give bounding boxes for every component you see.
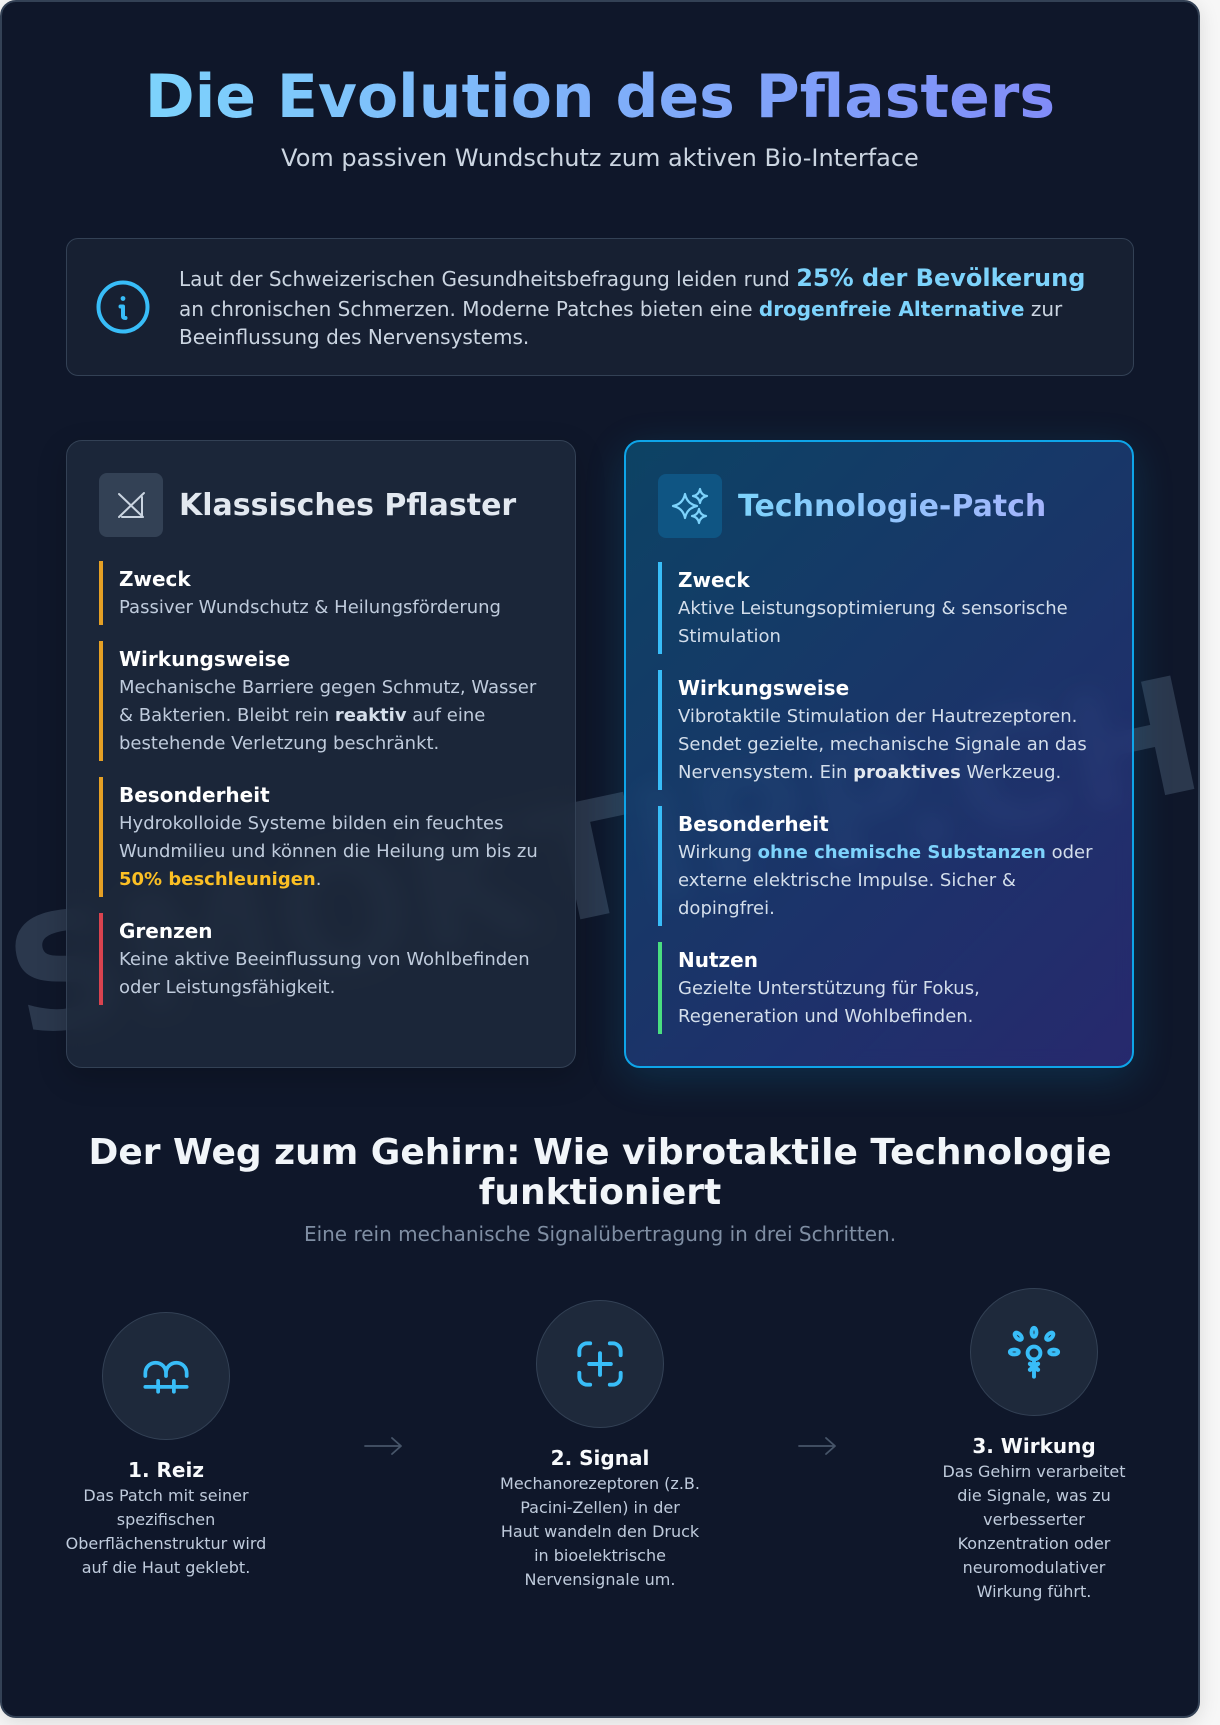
item: Zweck: Zweck xyxy=(119,567,191,591)
item: Besonderheit: Hydrokolloide Systeme bilden ein feuchtes xyxy=(119,813,503,834)
step text: die Signale, was zu xyxy=(957,1486,1111,1505)
title: Die Evolution des Pflasters xyxy=(145,62,1055,132)
step text xyxy=(942,1434,1126,1601)
step text: Konzentration oder xyxy=(958,1534,1110,1553)
section heading: funktioniert xyxy=(479,1172,721,1213)
item: Zweck xyxy=(99,561,543,625)
item: Besonderheit: Besonderheit xyxy=(119,783,270,807)
step text: neuromodulativer xyxy=(963,1558,1105,1577)
watermark: SMOKTIPP.CH xyxy=(0,642,1200,1075)
icon: info xyxy=(96,280,150,334)
step text: Haut wandeln den Druck xyxy=(501,1522,699,1541)
step text: 1. Reiz xyxy=(128,1458,204,1482)
step 3 xyxy=(942,1288,1126,1601)
item: Nutzen: Gezielte Unterstützung für Fokus, xyxy=(678,978,980,999)
item: Besonderheit xyxy=(99,777,543,897)
item: Besonderheit: 50% beschleunigen. xyxy=(119,869,321,890)
item: Wirkungsweise: & Bakterien. Bleibt rein reaktiv auf eine xyxy=(119,705,485,726)
callout text: an chronischen Schmerzen. Moderne Patches bieten eine drogenfreie Alternative zur xyxy=(179,297,1062,321)
item: Zweck: Passiver Wundschutz & Heilungsförderung xyxy=(119,597,501,618)
panel: statistic callout xyxy=(66,238,1134,376)
callout text: Laut der Schweizerischen Gesundheitsbefragung leiden rund 25% der Bevölkerung xyxy=(179,264,1085,292)
step text: Das Gehirn verarbeitet xyxy=(942,1462,1126,1481)
callout text: Beeinflussung des Nervensystems. xyxy=(179,325,529,349)
item: Wirkungsweise: Sendet gezielte, mechanische Signale an das xyxy=(678,734,1087,755)
item: Wirkungsweise: Nervensystem. Ein proaktives Werkzeug. xyxy=(678,762,1061,783)
heading: Technologie-Patch xyxy=(738,489,1046,524)
icon: sparkles xyxy=(658,474,722,538)
icon: plaster crossed xyxy=(99,473,163,537)
item: Besonderheit xyxy=(658,806,1100,926)
step text: Oberflächenstruktur wird xyxy=(66,1534,266,1553)
step text: auf die Haut geklebt. xyxy=(82,1558,250,1577)
item: Nutzen xyxy=(658,942,1100,1034)
step text xyxy=(66,1458,266,1577)
item: Grenzen xyxy=(99,913,543,1005)
section subtitle: Eine rein mechanische Signalübertragung in drei Schritten. xyxy=(304,1222,896,1246)
item: Grenzen: oder Leistungsfähigkeit. xyxy=(119,977,335,998)
item: Zweck: Zweck xyxy=(678,568,750,592)
item: Wirkungsweise: Mechanische Barriere gegen Schmutz, Wasser xyxy=(119,677,536,698)
step text: verbesserter xyxy=(983,1510,1085,1529)
step text: in bioelektrische xyxy=(534,1546,666,1565)
item: Besonderheit: Wirkung ohne chemische Substanzen oder xyxy=(678,842,1092,863)
item: Zweck: Stimulation xyxy=(678,626,781,647)
item: Nutzen: Regeneration und Wohlbefinden. xyxy=(678,1006,973,1027)
step text: spezifischen xyxy=(117,1510,215,1529)
card header: technology patch xyxy=(658,474,1046,538)
item: Wirkungsweise: Wirkungsweise xyxy=(119,647,290,671)
icon: brain light xyxy=(970,1288,1098,1416)
arrow 2 xyxy=(798,1437,836,1455)
item: Nutzen: Nutzen xyxy=(678,948,758,972)
item: Grenzen: Keine aktive Beeinflussung von Wohlbefinden xyxy=(119,949,530,970)
step text: 3. Wirkung xyxy=(972,1434,1096,1458)
panel: technology patch xyxy=(624,440,1134,1068)
step 1 xyxy=(66,1312,266,1577)
step 2 xyxy=(500,1300,700,1589)
step text xyxy=(500,1446,700,1589)
item: Wirkungsweise: Wirkungsweise xyxy=(678,676,849,700)
item: Besonderheit: externe elektrische Impulse. Sicher & xyxy=(678,870,1016,891)
item: Wirkungsweise xyxy=(99,641,543,761)
item: Zweck xyxy=(658,562,1100,654)
step text: Mechanorezeptoren (z.B. xyxy=(500,1474,700,1493)
item: Besonderheit: dopingfrei. xyxy=(678,898,775,919)
subtitle: Vom passiven Wundschutz zum aktiven Bio-Interface xyxy=(281,144,919,172)
item: Besonderheit: Wundmilieu und können die Heilung um bis zu xyxy=(119,841,538,862)
step text: Das Patch mit seiner xyxy=(83,1486,249,1505)
panel: classic plaster xyxy=(66,440,576,1068)
section heading: Der Weg zum Gehirn: Wie vibrotaktile Technologie xyxy=(88,1132,1112,1173)
step text: Pacini-Zellen) in der xyxy=(520,1498,680,1517)
icon: signal focus xyxy=(536,1300,664,1428)
step text: Wirkung führt. xyxy=(977,1582,1091,1601)
icon: patch surface xyxy=(102,1312,230,1440)
callout text xyxy=(179,264,1085,349)
section heading xyxy=(88,1132,1112,1213)
item: Wirkungsweise xyxy=(658,670,1100,790)
item: Besonderheit: Besonderheit xyxy=(678,812,829,836)
step text: 2. Signal xyxy=(551,1446,649,1470)
item: Zweck: Aktive Leistungsoptimierung & sensorische xyxy=(678,598,1068,619)
item: Wirkungsweise: Vibrotaktile Stimulation der Hautrezeptoren. xyxy=(678,706,1077,727)
item: Wirkungsweise: bestehende Verletzung beschränkt. xyxy=(119,733,439,754)
card header: classic plaster xyxy=(99,473,516,537)
arrow 1 xyxy=(364,1437,402,1455)
heading: Klassisches Pflaster xyxy=(179,488,516,523)
item: Grenzen: Grenzen xyxy=(119,919,213,943)
step text: Nervensignale um. xyxy=(525,1570,675,1589)
